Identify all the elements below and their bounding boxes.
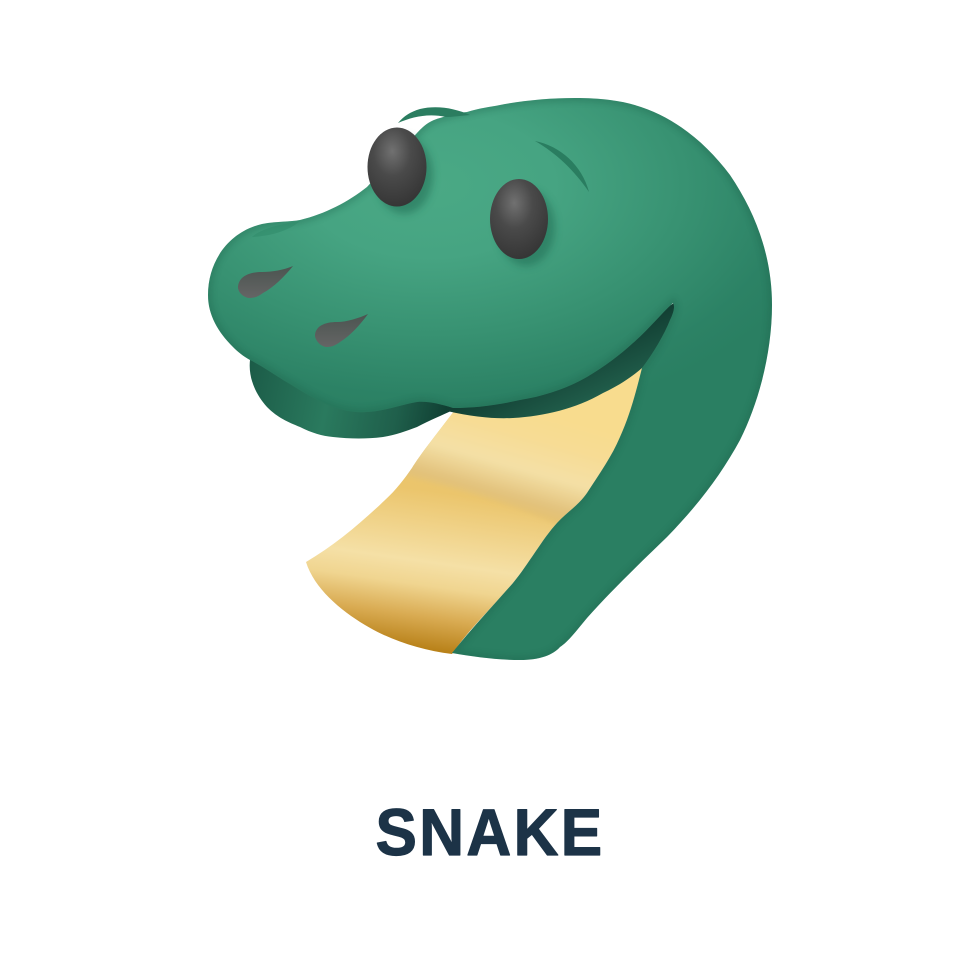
upper nostril: [238, 266, 293, 298]
right eye: [490, 179, 548, 259]
belly scales: [306, 368, 642, 654]
brow mark right: [535, 141, 589, 192]
lower jaw: [250, 360, 453, 438]
left eye: [368, 128, 426, 206]
eye shadow right: [497, 188, 555, 266]
head and neck body: [208, 98, 772, 660]
brow mark left: [398, 107, 470, 123]
lower nostril: [315, 314, 368, 347]
edge shading: [208, 98, 772, 660]
title: SNAKE: [376, 795, 604, 869]
snake illustration: [208, 98, 772, 670]
snout top shade: [252, 221, 300, 237]
eye shadow left: [375, 136, 433, 214]
mouth shadow band: [447, 296, 690, 418]
snake infographic: [208, 98, 772, 856]
